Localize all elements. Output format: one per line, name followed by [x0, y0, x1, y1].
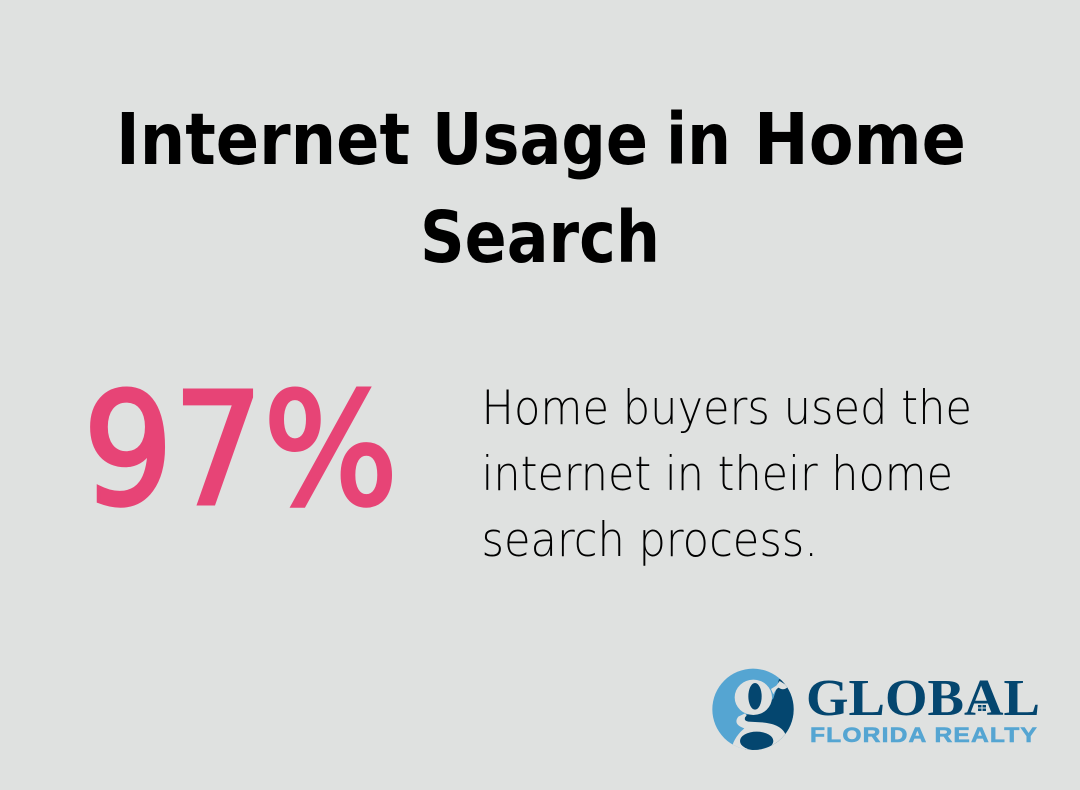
description text — [482, 381, 972, 568]
statistic: 97%: 97% — [83, 360, 398, 540]
title: Internet — [116, 98, 410, 181]
logo wordmark: GLOBAL: GLOBAL — [806, 670, 1040, 727]
title: Usage — [432, 98, 648, 181]
logo icon: g in circle — [712, 668, 794, 750]
logo wordmark: FLORIDA REALTY: FLORIDA REALTY — [810, 723, 1038, 747]
description text: search process. — [482, 513, 818, 568]
title: Search — [420, 196, 660, 279]
description text: Home buyers used the — [482, 381, 972, 436]
icon: house window in A — [978, 705, 986, 711]
title: Home — [754, 98, 966, 181]
title — [116, 98, 966, 279]
logo: Global Florida Realty — [712, 669, 1040, 755]
description text: internet in their home — [482, 447, 953, 502]
infographic canvas — [90, 110, 1038, 750]
title: in — [666, 98, 731, 181]
